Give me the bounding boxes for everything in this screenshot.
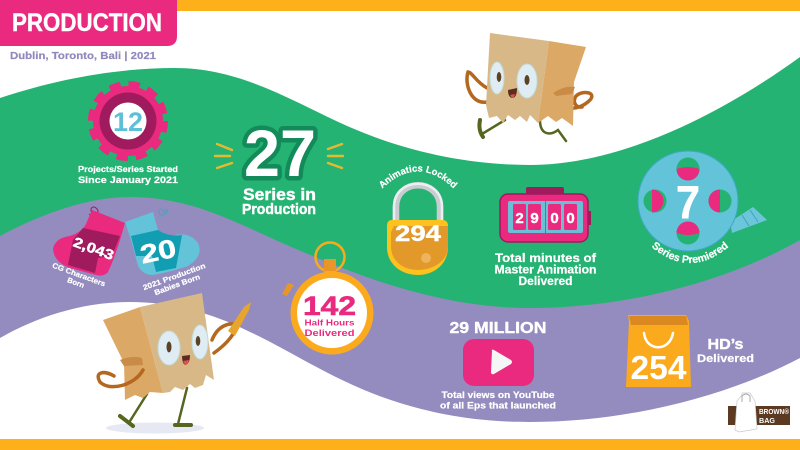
purple wave band — [0, 197, 800, 422]
stat: CG characters sock: Born — [66, 275, 86, 290]
stat: 29 million youtube views: 29 MILLION — [450, 320, 546, 337]
bottom yellow bar — [0, 439, 800, 450]
brown bag logo: BROWN® — [759, 407, 789, 416]
green wave band — [0, 57, 800, 340]
stat: projects started gear: 12 — [113, 107, 143, 137]
stat: HDs delivered bag — [626, 315, 754, 387]
stat: CG characters sock: 2,043 — [71, 234, 116, 263]
character: running paper bag — [467, 33, 592, 141]
stat: HDs delivered bag: 254 — [630, 349, 687, 386]
brown bag logo — [728, 393, 790, 432]
stat: animatics locked padlock: 294 — [395, 221, 442, 246]
stat: 27 series in production: 27 — [244, 116, 316, 190]
title banner: PRODUCTION — [12, 9, 162, 37]
stat: half hours stopwatch — [282, 242, 374, 354]
stat: half hours stopwatch: Half Hours — [304, 318, 355, 328]
stat: CG characters sock — [51, 207, 125, 290]
stat: animatics locked padlock: Animatics Locked — [380, 165, 458, 189]
stat: animatics locked padlock — [380, 165, 458, 275]
stat: projects started gear: Since January 2021 — [78, 175, 178, 185]
stat: series premiered film reel — [638, 150, 767, 264]
stat: 29 million youtube views — [440, 320, 556, 410]
top yellow bar — [0, 0, 800, 11]
subtitle: Dublin, Toronto, Bali | 2021 — [10, 50, 156, 62]
stat: 29 million youtube views: Total views on YouTube — [442, 390, 554, 400]
stat: 27 series in production: Series in — [243, 186, 316, 204]
stat: master animation minutes clock: 0 — [550, 210, 559, 227]
stat: master animation minutes clock: Master Animation — [494, 264, 596, 276]
stat: series premiered film reel: 7 — [676, 176, 700, 228]
stat: 27 series in production: Production — [242, 202, 316, 218]
stat: 27 series in production — [215, 116, 343, 218]
stat: production babies sock: Babies Born — [153, 272, 202, 297]
stat: HDs delivered bag: Delivered — [697, 353, 754, 365]
stat: master animation minutes clock: Delivered — [518, 276, 572, 288]
stat: master animation minutes clock: 0 — [566, 210, 575, 227]
stat: half hours stopwatch: 142 — [303, 291, 356, 321]
stat: half hours stopwatch: Delivered — [304, 328, 355, 339]
brown bag logo: BAG — [759, 416, 775, 425]
stat: production babies sock: 2021 Production — [142, 261, 207, 292]
stat: CG characters sock: CG Characters — [51, 261, 107, 288]
stat: 29 million youtube views: of all Eps that launched — [440, 400, 556, 410]
stat: projects started gear — [78, 84, 178, 185]
character: paper bag with pencil — [98, 293, 251, 434]
stat: master animation minutes clock: 9 — [530, 210, 539, 227]
stat: projects started gear: Projects/Series Started — [78, 165, 178, 174]
stat: HDs delivered bag: HD’s — [708, 336, 744, 353]
title banner — [0, 0, 177, 46]
stat: series premiered film reel: Series Premiered — [652, 241, 728, 264]
stat: production babies sock — [125, 209, 207, 297]
stat: master animation minutes clock: 2 — [515, 210, 524, 227]
stat: master animation minutes clock — [494, 187, 596, 288]
stat: production babies sock: 20 — [137, 233, 179, 270]
stat: master animation minutes clock: Total minutes of — [495, 253, 596, 265]
